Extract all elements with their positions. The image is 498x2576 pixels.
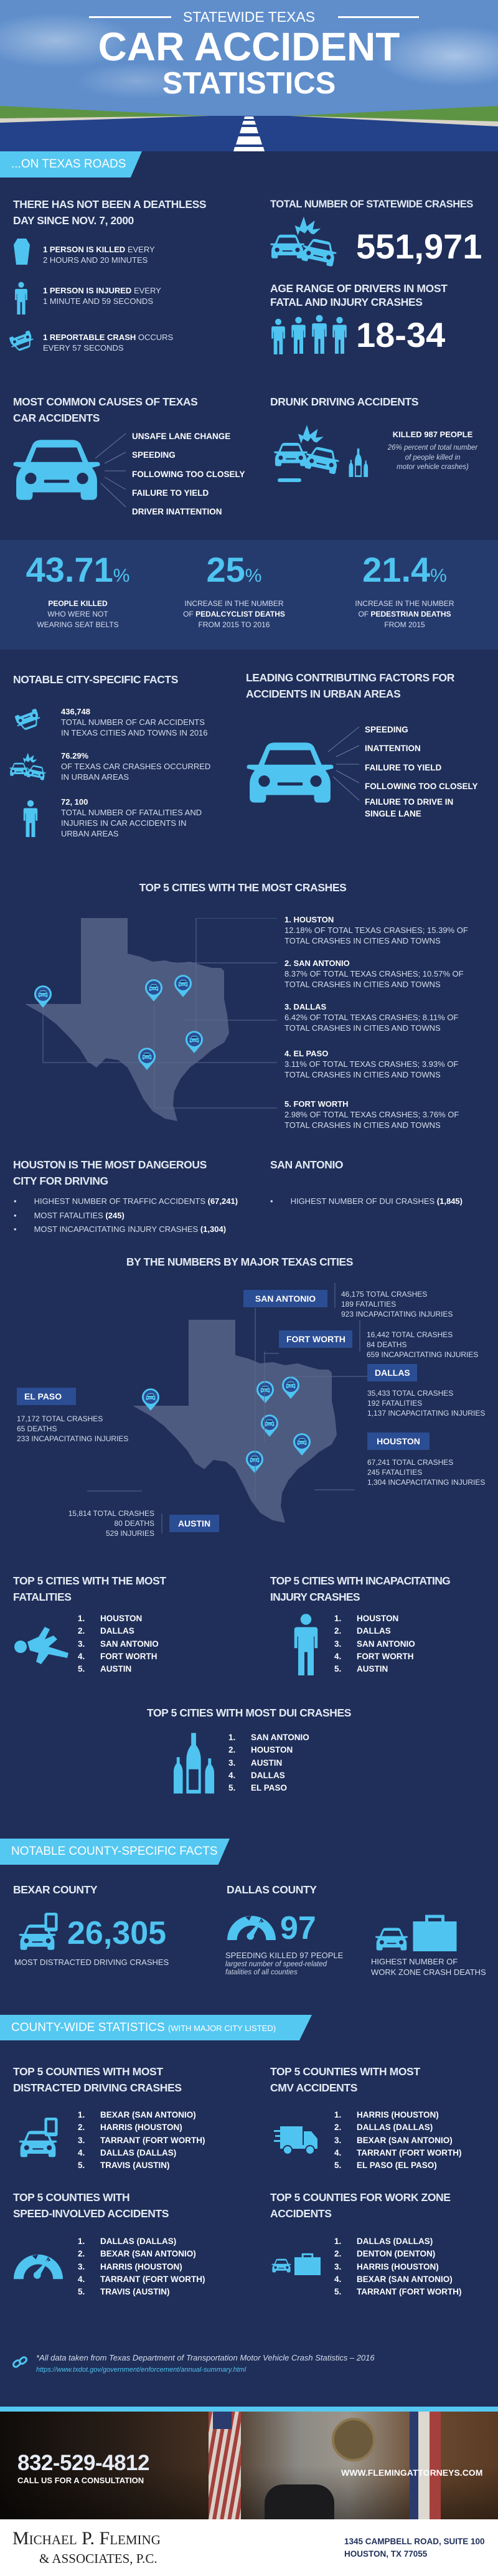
label: dallas	[367, 1364, 485, 1418]
header: sky and road	[0, 0, 498, 151]
list: fatalities: 4.	[78, 1652, 85, 1661]
stat: pedestrian	[355, 550, 454, 629]
icon: gauge	[227, 1913, 276, 1941]
label: houston: 67,241 TOTAL CRASHES	[367, 1458, 453, 1467]
icon: car with phone	[19, 2118, 59, 2159]
heading: total statewide crashes: TOTAL NUMBER OF STATEWIDE CRASHES	[270, 199, 473, 210]
fact: 72,100: URBAN AREAS	[61, 829, 118, 838]
logo	[12, 2528, 199, 2572]
source note: https://www.txdot.gov/government/enforcement/annual-summary.html	[36, 2366, 246, 2374]
heading: distracted counties: TOP 5 COUNTIES WITH MOST	[13, 2065, 163, 2078]
item: crash: 1 REPORTABLE CRASH OCCURS	[43, 333, 173, 342]
list: dui: 4.	[228, 1771, 235, 1780]
pins	[142, 1376, 311, 1473]
heading: work zone counties: TOP 5 COUNTIES FOR WORK ZONE	[270, 2191, 451, 2204]
icon: flipped car	[9, 330, 34, 351]
stat: pedalcyclist: 25%	[207, 550, 261, 589]
list: speed counties: 4.	[78, 2275, 85, 2284]
list: causes	[95, 432, 245, 516]
list: work zone counties: HARRIS (HOUSTON)	[357, 2262, 439, 2271]
list: speed counties	[78, 2235, 240, 2298]
list: top 5 cities details: 8.37% OF TOTAL TEXAS CRASHES; 10.57% OF	[284, 969, 464, 978]
title	[89, 9, 419, 100]
list: cmv counties: 3.	[334, 2136, 341, 2145]
heading: speed counties	[13, 2189, 250, 2222]
stat: pedalcyclist	[183, 550, 285, 629]
list: dui: HOUSTON	[251, 1745, 293, 1754]
label: houston: HOUSTON	[377, 1436, 420, 1446]
number: 551,971: 551,971	[356, 227, 482, 266]
list: work zone counties: 1.	[334, 2237, 341, 2246]
icon: link	[12, 2356, 27, 2369]
list: top 5 cities details: 4. EL PASO	[284, 1049, 328, 1058]
icon: gauge	[14, 2252, 63, 2280]
text: speeding killed: fatalities of all counties	[225, 1969, 298, 1976]
stat: pedestrian: INCREASE IN THE NUMBER	[355, 599, 454, 608]
list: cmv counties: DALLAS (DALLAS)	[357, 2123, 433, 2132]
item: injured: 1 PERSON IS INJURED EVERY	[43, 286, 161, 295]
list: cmv counties: BEXAR (SAN ANTONIO)	[357, 2136, 453, 2145]
footer white	[0, 2519, 498, 2576]
seal	[332, 2418, 375, 2461]
list: fatalities	[78, 1612, 202, 1675]
heading: deathless day: THERE HAS NOT BEEN A DEATHLESS	[13, 198, 206, 211]
list: top 5 cities details: 5. FORT WORTH	[284, 1099, 349, 1109]
label: distracted: MOST DISTRACTED DRIVING CRASHES	[14, 1958, 169, 1967]
fact: 76.29%	[9, 751, 210, 782]
fact: 72,100	[24, 797, 202, 838]
website: WWW.FLEMINGATTORNEYS.COM	[341, 2468, 482, 2478]
number: 97: 97	[280, 1910, 316, 1946]
list: houston bullets: • MOST FATALITIES (245)	[14, 1211, 125, 1219]
list: top 5 cities details: 2.98% OF TOTAL TEXAS CRASHES; 3.76% OF	[284, 1110, 459, 1119]
list: top 5 cities details	[284, 915, 468, 1130]
list: incapacitating: DALLAS	[357, 1626, 391, 1636]
list: fatalities: 1.	[78, 1614, 85, 1623]
list: houston bullets: • HIGHEST NUMBER OF TRAFFIC ACCIDENTS (67,241)	[14, 1196, 238, 1206]
logo: & ASSOCIATES, P.C.	[39, 2551, 157, 2566]
text: work zone deaths	[371, 1956, 498, 1977]
label: austin: 15,814 TOTAL CRASHES	[68, 1509, 154, 1518]
list: causes: DRIVER INATTENTION	[132, 507, 222, 516]
number: 18-34: 18-34	[356, 315, 445, 354]
list: cmv counties: 5.	[334, 2161, 341, 2170]
heading: work zone counties: ACCIDENTS	[270, 2207, 331, 2220]
label: el paso: 233 INCAPACITATING INJURIES	[17, 1434, 128, 1443]
list: speed counties: TRAVIS (AUSTIN)	[100, 2287, 169, 2296]
list: work zone counties: 2.	[334, 2249, 341, 2258]
heading: bexar county: BEXAR COUNTY	[13, 1883, 97, 1896]
banner: on texas roads	[0, 151, 142, 178]
label: fort worth	[279, 1330, 478, 1359]
bullet: san antonio dui: • HIGHEST NUMBER OF DUI CRASHES (1,845)	[270, 1196, 463, 1206]
icon: car front	[247, 742, 334, 803]
item: injured: 1 MINUTE AND 59 SECONDS	[43, 296, 153, 306]
list: dui: 3.	[228, 1758, 235, 1768]
stat: pedalcyclist: INCREASE IN THE NUMBER	[184, 599, 284, 608]
list: top 5 cities details: 12.18% OF TOTAL TEXAS CRASHES; 15.39% OF	[284, 926, 468, 935]
title: STATISTICS	[162, 67, 336, 100]
icon: coffin	[14, 239, 30, 265]
label: fort worth: 84 DEATHS	[367, 1340, 406, 1349]
heading: cmv counties: TOP 5 COUNTIES WITH MOST	[270, 2065, 420, 2078]
icon: car front	[14, 440, 100, 500]
label: san antonio: 189 FATALITIES	[341, 1300, 396, 1309]
heading: age range: AGE RANGE OF DRIVERS IN MOST	[270, 282, 447, 295]
list: fatalities: 5.	[78, 1664, 85, 1674]
heading: deathless day	[13, 198, 206, 227]
heading: top 5 incapacitating: TOP 5 CITIES WITH INCAPACITATING	[270, 1574, 450, 1587]
label: fort worth: FORT WORTH	[286, 1334, 345, 1344]
icon: car and briefcase	[271, 2253, 321, 2275]
list: speed counties: BEXAR (SAN ANTONIO)	[100, 2249, 196, 2258]
label: san antonio: 46,175 TOTAL CRASHES	[341, 1290, 427, 1299]
fact: 76.29%: IN URBAN AREAS	[61, 772, 129, 782]
list: dui: DALLAS	[251, 1771, 285, 1780]
text: killed 987: of people killed in	[405, 453, 460, 461]
label: austin: 80 DEATHS	[115, 1519, 154, 1528]
list: speed counties: DALLAS (DALLAS)	[100, 2237, 176, 2246]
text: killed 987: 26% percent of total number	[388, 444, 477, 452]
banner: county facts: NOTABLE COUNTY-SPECIFIC FACTS	[11, 1845, 218, 1858]
heading: age range	[270, 282, 448, 308]
heading: drunk driving: DRUNK DRIVING ACCIDENTS	[270, 395, 418, 408]
list: urban factors: FAILURE TO DRIVE IN	[365, 797, 453, 807]
label: san antonio: SAN ANTONIO	[255, 1294, 316, 1304]
list: causes: UNSAFE LANE CHANGE	[132, 432, 230, 441]
list: speed counties: 3.	[78, 2262, 85, 2271]
banner: county-wide statistics: COUNTY-WIDE STATISTICS (WITH MAJOR CITY LISTED)	[11, 2021, 276, 2034]
heading: top 5 cities most crashes: TOP 5 CITIES WITH THE MOST CRASHES	[139, 881, 346, 894]
item: injured	[15, 282, 161, 315]
heading: work zone counties	[270, 2189, 498, 2222]
list: cmv counties: EL PASO (EL PASO)	[357, 2161, 437, 2170]
icon: injured person	[24, 800, 37, 837]
label: dallas: DALLAS	[375, 1368, 410, 1378]
label: san antonio: 923 INCAPACITATING INJURIES	[341, 1310, 453, 1319]
list: work zone counties: 4.	[334, 2275, 341, 2284]
list: distracted counties	[78, 2109, 240, 2172]
list: urban factors: FOLLOWING TOO CLOSELY	[365, 782, 478, 791]
list: work zone counties: DENTON (DENTON)	[357, 2249, 435, 2258]
heading: san antonio: SAN ANTONIO	[270, 1158, 343, 1171]
heading: top 5 fatalities	[13, 1573, 237, 1605]
strip	[0, 2407, 498, 2412]
list: dui	[228, 1731, 353, 1794]
text: work zone deaths: WORK ZONE CRASH DEATHS	[371, 1968, 486, 1977]
stat: pedestrian: 21.4%	[362, 550, 447, 589]
map: major cities	[133, 1320, 337, 1523]
list: dui: 2.	[228, 1745, 235, 1754]
list: work zone counties: BEXAR (SAN ANTONIO)	[357, 2275, 453, 2284]
list: distracted counties: 3.	[78, 2136, 85, 2145]
item: crash: EVERY 57 SECONDS	[43, 343, 124, 353]
stat: seat belts: PEOPLE KILLED	[48, 599, 108, 608]
icon: four people	[271, 315, 347, 354]
pins	[34, 975, 203, 1070]
list: fatalities: 3.	[78, 1639, 85, 1649]
list: incapacitating: HOUSTON	[357, 1614, 398, 1623]
source note: *All data taken from Texas Department of Transportation Motor Vehicle Crash Statistics – 2016	[36, 2353, 375, 2362]
icon: crash cars	[270, 217, 336, 267]
address: HOUSTON, TX 77055	[344, 2549, 427, 2559]
list: fatalities: AUSTIN	[100, 1664, 131, 1674]
text: killed 987: motor vehicle crashes)	[397, 463, 469, 471]
list: cmv counties: TARRANT (FORT WORTH)	[357, 2148, 461, 2157]
fact: 76.29%: OF TEXAS CAR CRASHES OCCURRED	[61, 762, 210, 771]
list: top 5 cities details: TOTAL CRASHES IN CITIES AND TOWNS	[284, 936, 441, 945]
list: incapacitating	[334, 1612, 459, 1675]
list: speed counties: 1.	[78, 2237, 85, 2246]
list: cmv counties: 4.	[334, 2148, 341, 2157]
icon: falling person	[14, 1626, 71, 1667]
stat: pedestrian: OF PEDESTRIAN DEATHS	[358, 610, 451, 618]
list: top 5 cities details: TOTAL CRASHES IN CITIES AND TOWNS	[284, 1070, 441, 1079]
fact: 436,748: TOTAL NUMBER OF CAR ACCIDENTS	[61, 717, 205, 727]
stat: seat belts	[26, 550, 129, 629]
list: incapacitating: 4.	[334, 1652, 341, 1661]
list: causes: FAILURE TO YIELD	[132, 488, 209, 498]
list: work zone counties	[334, 2235, 496, 2298]
list: houston bullets: • MOST INCAPACITATING INJURY CRASHES (1,304)	[14, 1224, 226, 1234]
logo: Michael P. Fleming	[12, 2528, 161, 2549]
stats band	[0, 540, 498, 650]
label: houston	[367, 1432, 485, 1487]
list: incapacitating: AUSTIN	[357, 1664, 388, 1674]
heading: most common causes: CAR ACCIDENTS	[13, 412, 100, 424]
list: top 5 cities details: 3.11% OF TOTAL TEXAS CRASHES; 3.93% OF	[284, 1059, 458, 1069]
heading: houston most dangerous: CITY FOR DRIVING	[13, 1175, 108, 1187]
stat: seat belts: WEARING SEAT BELTS	[37, 620, 119, 629]
icon: car with phone	[19, 1913, 59, 1953]
icon: bottles	[173, 1732, 215, 1794]
fact: 72,100: TOTAL NUMBER OF FATALITIES AND	[61, 808, 202, 817]
title: STATEWIDE TEXAS	[183, 9, 315, 25]
item: crash	[9, 330, 173, 353]
list: speed counties: 5.	[78, 2287, 85, 2296]
list: fatalities: HOUSTON	[100, 1614, 142, 1623]
list: incapacitating: SAN ANTONIO	[357, 1639, 415, 1649]
list: causes: FOLLOWING TOO CLOSELY	[132, 470, 245, 479]
list: urban factors: SPEEDING	[365, 725, 408, 734]
phone number: 832-529-4812	[17, 2451, 149, 2475]
list: houston bullets	[14, 1196, 238, 1234]
list: fatalities: FORT WORTH	[100, 1652, 157, 1661]
fact: 436,748: IN TEXAS CITIES AND TOWNS IN 2016	[61, 728, 208, 737]
heading: leading factors	[246, 671, 454, 700]
banner: county facts	[0, 1839, 230, 1865]
fact: 72,100: 72, 100	[61, 797, 88, 807]
heading: distracted counties	[13, 2063, 250, 2096]
label: el paso: 17,172 TOTAL CRASHES	[17, 1414, 103, 1423]
list: urban factors: FAILURE TO YIELD	[365, 763, 441, 772]
list: distracted counties: DALLAS (DALLAS)	[100, 2148, 176, 2157]
heading: most common causes: MOST COMMON CAUSES OF TEXAS	[13, 395, 197, 408]
heading: speed counties: TOP 5 COUNTIES WITH	[13, 2191, 129, 2204]
list: cmv counties: 1.	[334, 2110, 341, 2119]
phone number: CALL US FOR A CONSULTATION	[17, 2476, 144, 2485]
fact: 76.29%: 76.29%	[61, 751, 88, 760]
list: speed counties: TARRANT (FORT WORTH)	[100, 2275, 205, 2284]
stat: pedalcyclist: FROM 2015 TO 2016	[199, 620, 270, 629]
list: urban factors	[327, 725, 478, 818]
source note	[12, 2352, 448, 2375]
flag: us	[209, 2412, 241, 2519]
map: texas with pins	[25, 918, 277, 1121]
heading: top 5 fatalities: TOP 5 CITIES WITH THE MOST	[13, 1574, 166, 1587]
list: distracted counties: 4.	[78, 2148, 85, 2157]
list: dui: 5.	[228, 1783, 235, 1792]
list: distracted counties: 2.	[78, 2123, 85, 2132]
label: austin: AUSTIN	[178, 1518, 210, 1528]
list: fatalities: SAN ANTONIO	[100, 1639, 159, 1649]
list: incapacitating: FORT WORTH	[357, 1652, 413, 1661]
list: top 5 cities details: 3. DALLAS	[284, 1002, 326, 1011]
banner: county-wide statistics	[0, 2015, 312, 2040]
list: top 5 cities details: 1. HOUSTON	[284, 915, 334, 924]
list: urban factors: SINGLE LANE	[365, 809, 421, 818]
stat: pedalcyclist: OF PEDALCYCLIST DEATHS	[183, 610, 285, 618]
heading: houston most dangerous: HOUSTON IS THE MOST DANGEROUS	[13, 1158, 207, 1171]
heading: deathless day: DAY SINCE NOV. 7, 2000	[13, 214, 134, 227]
heading: age range: FATAL AND INJURY CRASHES	[270, 296, 423, 308]
heading: top 5 fatalities: FATALITIES	[13, 1591, 72, 1603]
list: top 5 cities details: TOTAL CRASHES IN CITIES AND TOWNS	[284, 1120, 441, 1130]
heading: most common causes	[13, 395, 198, 424]
list: distracted counties: HARRIS (HOUSTON)	[100, 2123, 182, 2132]
heading: cmv counties: CMV ACCIDENTS	[270, 2081, 357, 2094]
stat: seat belts: 43.71%	[26, 550, 129, 589]
icon: crash with bottles	[274, 425, 369, 482]
list: causes: SPEEDING	[132, 450, 176, 460]
list: distracted counties: TARRANT (FORT WORTH)	[100, 2136, 205, 2145]
list: urban factors: INATTENTION	[365, 744, 421, 753]
list: work zone counties: TARRANT (FORT WORTH)	[357, 2287, 461, 2296]
label: dallas: 192 FATALITIES	[367, 1399, 422, 1408]
label: dallas: 35,433 TOTAL CRASHES	[367, 1389, 453, 1398]
banner: on texas roads: ...ON TEXAS ROADS	[11, 158, 126, 171]
flag: texas	[410, 2412, 441, 2519]
list: speed counties: HARRIS (HOUSTON)	[100, 2262, 182, 2271]
address	[344, 2536, 485, 2560]
list: distracted counties: 1.	[78, 2110, 85, 2119]
stat: seat belts: WHO WERE NOT	[47, 610, 108, 618]
fact: 72,100: INJURIES IN CAR ACCIDENTS IN	[61, 818, 187, 828]
icon: injured person	[15, 282, 27, 315]
list: dui: AUSTIN	[251, 1758, 282, 1768]
list: incapacitating: 2.	[334, 1626, 341, 1636]
list: dui: EL PASO	[251, 1783, 287, 1792]
footer photo	[0, 2412, 498, 2519]
list: speed counties: 2.	[78, 2249, 85, 2258]
list: cmv counties: HARRIS (HOUSTON)	[357, 2110, 439, 2119]
heading: leading factors: ACCIDENTS IN URBAN AREAS	[246, 688, 400, 700]
list: distracted counties: 5.	[78, 2161, 85, 2170]
icon: truck	[274, 2124, 317, 2155]
label: austin: 529 INJURIES	[106, 1529, 154, 1538]
icon: car and briefcase	[375, 1914, 457, 1951]
fact: 436,748	[15, 707, 208, 737]
heading: distracted counties: DISTRACTED DRIVING CRASHES	[13, 2081, 182, 2094]
heading: top 5 dui: TOP 5 CITIES WITH MOST DUI CRASHES	[147, 1707, 351, 1719]
label: austin	[62, 1508, 221, 1537]
number: 26,305: 26,305	[67, 1915, 166, 1951]
icon: crash	[9, 752, 46, 780]
list: top 5 cities details: TOTAL CRASHES IN CITIES AND TOWNS	[284, 980, 441, 989]
list: distracted counties: BEXAR (SAN ANTONIO)	[100, 2110, 196, 2119]
label: fort worth: 659 INCAPACITATING INJURIES	[367, 1350, 478, 1359]
item: killed	[14, 239, 155, 265]
icon: injured person	[293, 1613, 319, 1675]
text: killed 987: KILLED 987 PEOPLE	[393, 430, 472, 439]
item: killed: 1 PERSON IS KILLED EVERY	[43, 245, 155, 254]
heading: leading factors: LEADING CONTRIBUTING FACTORS FOR	[246, 671, 454, 684]
stat: pedestrian: FROM 2015	[384, 620, 425, 629]
label: san antonio	[243, 1290, 453, 1319]
heading: dallas county: DALLAS COUNTY	[227, 1883, 317, 1896]
heading: cmv counties	[270, 2063, 498, 2096]
list: cmv counties	[334, 2109, 496, 2172]
list: work zone counties: 3.	[334, 2262, 341, 2271]
heading: top 5 incapacitating	[270, 1573, 498, 1605]
title: CAR ACCIDENT	[98, 24, 400, 69]
label: el paso: 65 DEATHS	[17, 1424, 57, 1433]
fact: 436,748: 436,748	[61, 707, 90, 716]
list: incapacitating: 3.	[334, 1639, 341, 1649]
list: dui: 1.	[228, 1733, 235, 1742]
text: speeding killed: SPEEDING KILLED 97 PEOPLE	[225, 1951, 343, 1960]
list: work zone counties: DALLAS (DALLAS)	[357, 2237, 433, 2246]
list: dui: SAN ANTONIO	[251, 1733, 309, 1742]
label: el paso: EL PASO	[24, 1391, 62, 1401]
list: distracted counties: TRAVIS (AUSTIN)	[100, 2161, 169, 2170]
heading: top 5 incapacitating: INJURY CRASHES	[270, 1591, 360, 1603]
list: top 5 cities details: 2. SAN ANTONIO	[284, 959, 350, 968]
chair	[265, 2484, 334, 2522]
heading: by the numbers: BY THE NUMBERS BY MAJOR TEXAS CITIES	[126, 1256, 353, 1268]
heading: speed counties: SPEED-INVOLVED ACCIDENTS	[13, 2207, 169, 2220]
label: fort worth: 16,442 TOTAL CRASHES	[367, 1330, 453, 1339]
text: killed 987	[387, 430, 478, 471]
list: fatalities: DALLAS	[100, 1626, 134, 1636]
address: 1345 CAMPBELL ROAD, SUITE 100	[344, 2537, 485, 2546]
list: incapacitating: 1.	[334, 1614, 341, 1623]
text: work zone deaths: HIGHEST NUMBER OF	[371, 1957, 458, 1966]
list: incapacitating: 5.	[334, 1664, 341, 1674]
phone number	[17, 2451, 179, 2488]
icon: flipped car	[15, 709, 40, 730]
list: work zone counties: 5.	[334, 2287, 341, 2296]
heading: houston most dangerous	[13, 1158, 207, 1187]
list: cmv counties: 2.	[334, 2123, 341, 2132]
label: dallas: 1,137 INCAPACITATING INJURIES	[367, 1409, 485, 1418]
heading: notable city facts: NOTABLE CITY-SPECIFIC FACTS	[13, 673, 178, 686]
item: killed: 2 HOURS AND 20 MINUTES	[43, 255, 148, 265]
label: houston: 1,304 INCAPACITATING INJURIES	[367, 1478, 485, 1487]
list: fatalities: 2.	[78, 1626, 85, 1636]
label: el paso	[17, 1388, 141, 1444]
text: speeding killed	[225, 1950, 369, 1977]
list: top 5 cities details: TOTAL CRASHES IN CITIES AND TOWNS	[284, 1023, 441, 1033]
list: top 5 cities details: 6.42% OF TOTAL TEXAS CRASHES; 8.11% OF	[284, 1013, 458, 1022]
label: houston: 245 FATALITIES	[367, 1468, 422, 1477]
text: speeding killed: largest number of speed-related	[225, 1961, 327, 1968]
